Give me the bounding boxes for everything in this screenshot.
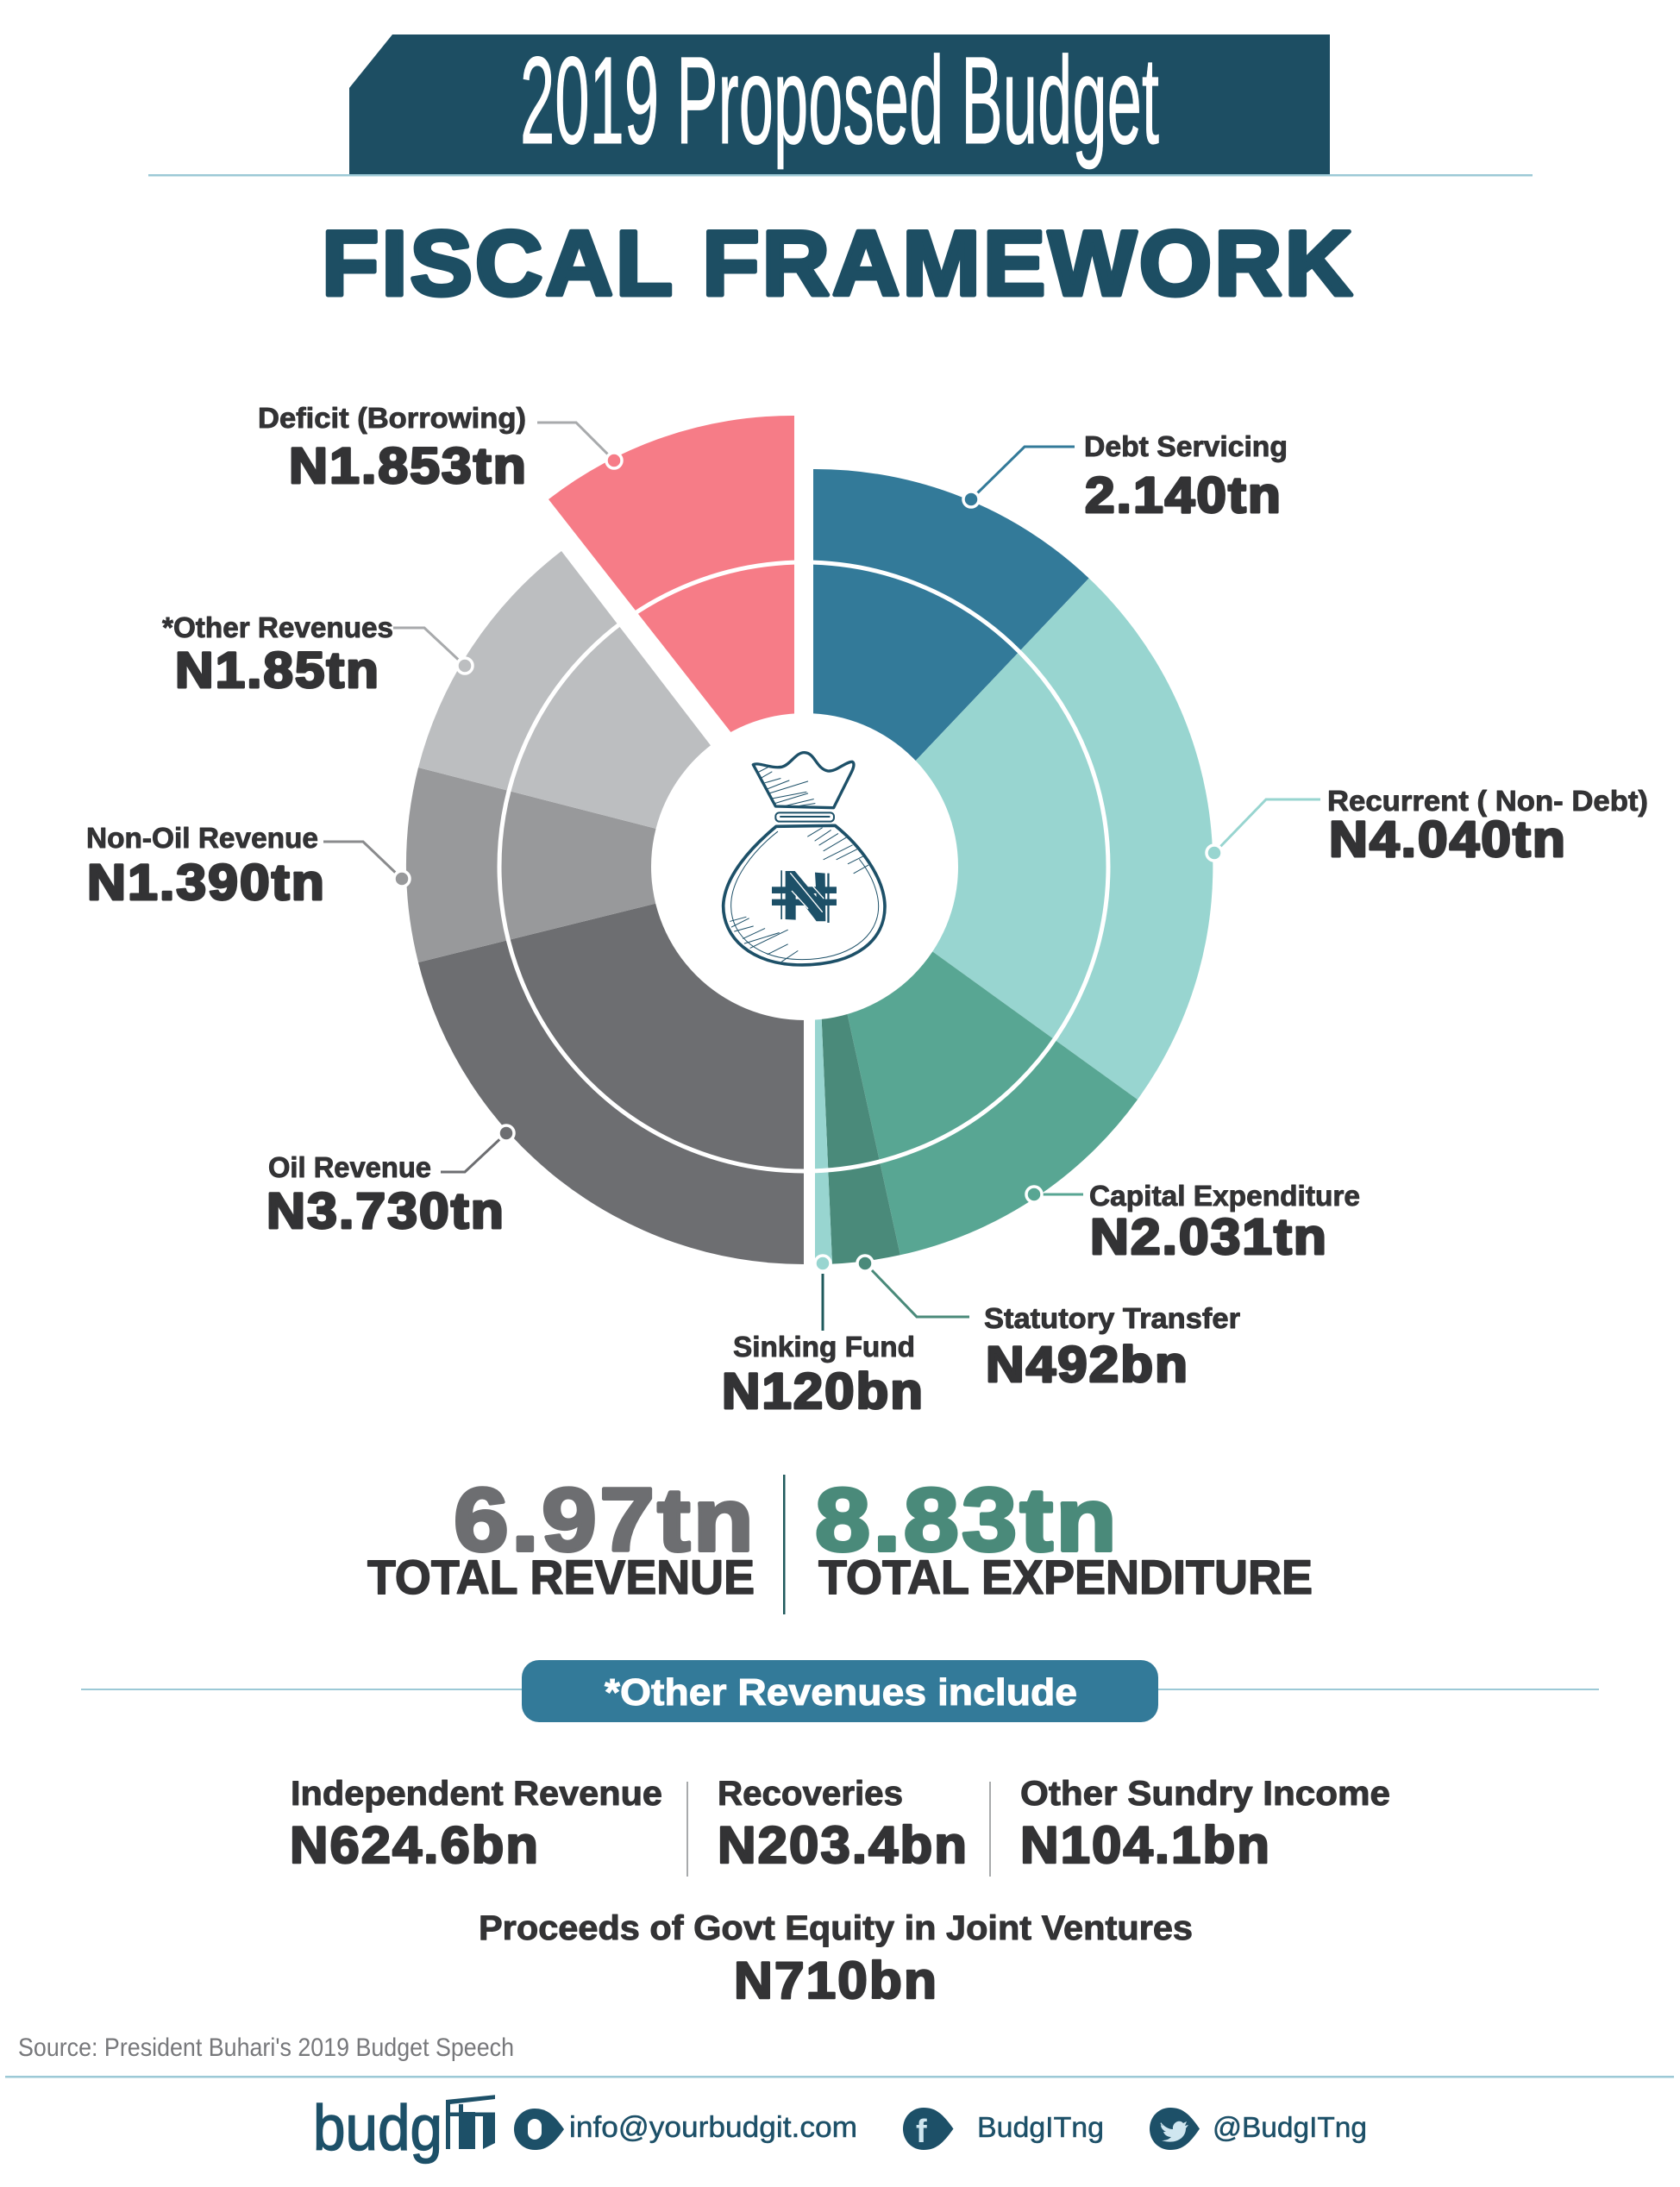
footer rule: [5, 2076, 1674, 2078]
contact: email address: info@yourbudgit.com: [569, 2111, 857, 2144]
segment: other revenues: [418, 551, 804, 867]
section pill: other revenues include: [522, 1660, 1158, 1722]
callout: deficit: [258, 402, 622, 494]
divider: [783, 1475, 785, 1614]
callout: other revenues: [162, 611, 473, 699]
segment: statutory transfer: [815, 867, 900, 1264]
callout: statutory transfer: N492bn: [986, 1337, 1189, 1393]
callout: debt servicing: 2.140tn: [1085, 467, 1282, 523]
icon: facebook: [903, 2108, 954, 2150]
title banner: [349, 31, 1330, 174]
segment: recurrent non-debt: [815, 578, 1213, 1100]
callout: oil revenue: Oil Revenue: [268, 1151, 431, 1183]
item: proceeds of govt equity: [479, 1909, 1193, 2009]
separators: [686, 1782, 991, 1877]
item: independent revenue: N624.6bn: [290, 1816, 540, 1874]
callout: other revenues: N1.85tn: [175, 642, 380, 699]
source note: Source: President Buhari's 2019 Budget Speech: [18, 2033, 514, 2062]
section rule: [81, 1689, 1599, 1690]
callout: non-oil revenue: [86, 822, 410, 911]
total revenue: 6.97tn: [454, 1470, 756, 1570]
icon: email: [514, 2109, 564, 2150]
callout: other revenues: *Other Revenues: [162, 611, 393, 643]
callout: sinking fund: [722, 1256, 925, 1419]
segment: deficit (exploded): [549, 416, 794, 813]
segment: non-oil revenue: [406, 768, 804, 962]
segment: oil revenue: [418, 867, 804, 1264]
item: independent revenue: Independent Revenue: [291, 1775, 662, 1813]
centre hole: [651, 713, 958, 1020]
callout: oil revenue: N3.730tn: [266, 1183, 505, 1239]
item: independent revenue: [290, 1775, 662, 1874]
item: recoveries: [718, 1775, 969, 1874]
callout: non-oil revenue: N1.390tn: [87, 855, 326, 911]
total revenue: [367, 1470, 756, 1604]
callout: sinking fund: Sinking Fund: [733, 1331, 915, 1363]
contact: facebook handle: BudgITng: [977, 2111, 1104, 2143]
item: proceeds of govt equity: Proceeds of Govt Equity in Joint Ventures: [479, 1909, 1193, 1947]
section pill: other revenues include: *Other Revenues include: [605, 1671, 1077, 1714]
contact: twitter handle: @BudgITng: [1213, 2111, 1367, 2143]
callout: sinking fund: N120bn: [722, 1363, 925, 1419]
callout: capital expenditure: N2.031tn: [1090, 1209, 1328, 1265]
item: recoveries: N203.4bn: [718, 1816, 969, 1874]
callout: deficit: Deficit (Borrowing): [258, 402, 526, 434]
callout: capital expenditure: Capital Expenditure: [1089, 1180, 1360, 1212]
callout: capital expenditure: [1026, 1180, 1360, 1265]
total expenditure: [815, 1470, 1313, 1604]
item: other sundry income: N104.1bn: [1020, 1816, 1271, 1874]
icon: money bag with naira: [724, 753, 885, 965]
header rule: [148, 174, 1533, 176]
segment: debt servicing: [813, 469, 1089, 867]
callout: debt servicing: [963, 430, 1288, 523]
item: proceeds of govt equity: N710bn: [734, 1952, 938, 2009]
icon: facebook: f: [916, 2114, 927, 2150]
callout: non-oil revenue: Non-Oil Revenue: [86, 822, 318, 854]
donut chart: budget breakdown: [406, 416, 1213, 1264]
callout: recurrent non-debt: Recurrent ( Non- Debt): [1327, 785, 1648, 817]
total expenditure: TOTAL EXPENDITURE: [818, 1550, 1313, 1604]
icon: twitter: [1150, 2108, 1200, 2150]
segment: sinking fund: [815, 867, 832, 1264]
callout: debt servicing: Debt Servicing: [1084, 430, 1288, 462]
callout: recurrent non-debt: [1207, 785, 1648, 868]
total revenue: TOTAL REVENUE: [367, 1550, 755, 1604]
heading: fiscal framework: FISCAL FRAMEWORK: [322, 211, 1355, 315]
item: recoveries: Recoveries: [718, 1775, 903, 1813]
inner ring: [499, 562, 1108, 1171]
total expenditure: 8.83tn: [815, 1470, 1119, 1570]
item: other sundry income: [1020, 1775, 1390, 1874]
segment: capital expenditure: [815, 867, 1138, 1255]
callout: statutory transfer: [857, 1256, 1240, 1393]
logo: budgit: budg: [313, 2092, 442, 2164]
callout: recurrent non-debt: N4.040tn: [1329, 812, 1567, 868]
item: other sundry income: Other Sundry Income: [1020, 1775, 1390, 1813]
callout: deficit: N1.853tn: [289, 438, 528, 494]
callout: oil revenue: [266, 1125, 514, 1239]
callout: statutory transfer: Statutory Transfer: [984, 1302, 1240, 1334]
